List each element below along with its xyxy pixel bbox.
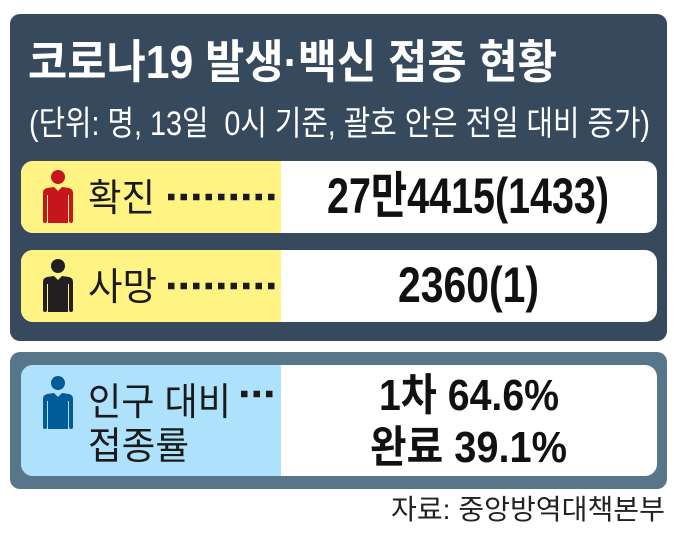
label: deaths: 사망 [88,267,157,309]
value: confirmed: 27만4415(1433) [327,168,609,224]
row: confirmed cases [21,161,657,233]
label: confirmed: 확진 [88,178,155,220]
icon: black person [43,259,73,312]
panel: cases and deaths [10,14,667,341]
label: vaccination rate: 접종률 [88,426,189,468]
label: vaccination rate [88,382,231,468]
panel: vaccination rate [10,352,667,489]
dotted leader [168,194,279,200]
value: deaths: 2360(1) [398,257,539,313]
dotted leader [241,391,274,397]
dotted leader [168,283,279,289]
value: fully vaccinated: 완료 39.1% [370,423,567,472]
title: 코로나19 발생·백신 접종 현황 [28,36,557,88]
icon: red person [43,170,73,223]
row: deaths [21,250,657,322]
value: first dose: 1차 64.6% [379,371,559,420]
source: 자료: 중앙방역대책본부 [391,494,665,525]
icon: blue person [43,376,73,429]
label: vaccination rate: 인구 대비 [88,382,231,424]
